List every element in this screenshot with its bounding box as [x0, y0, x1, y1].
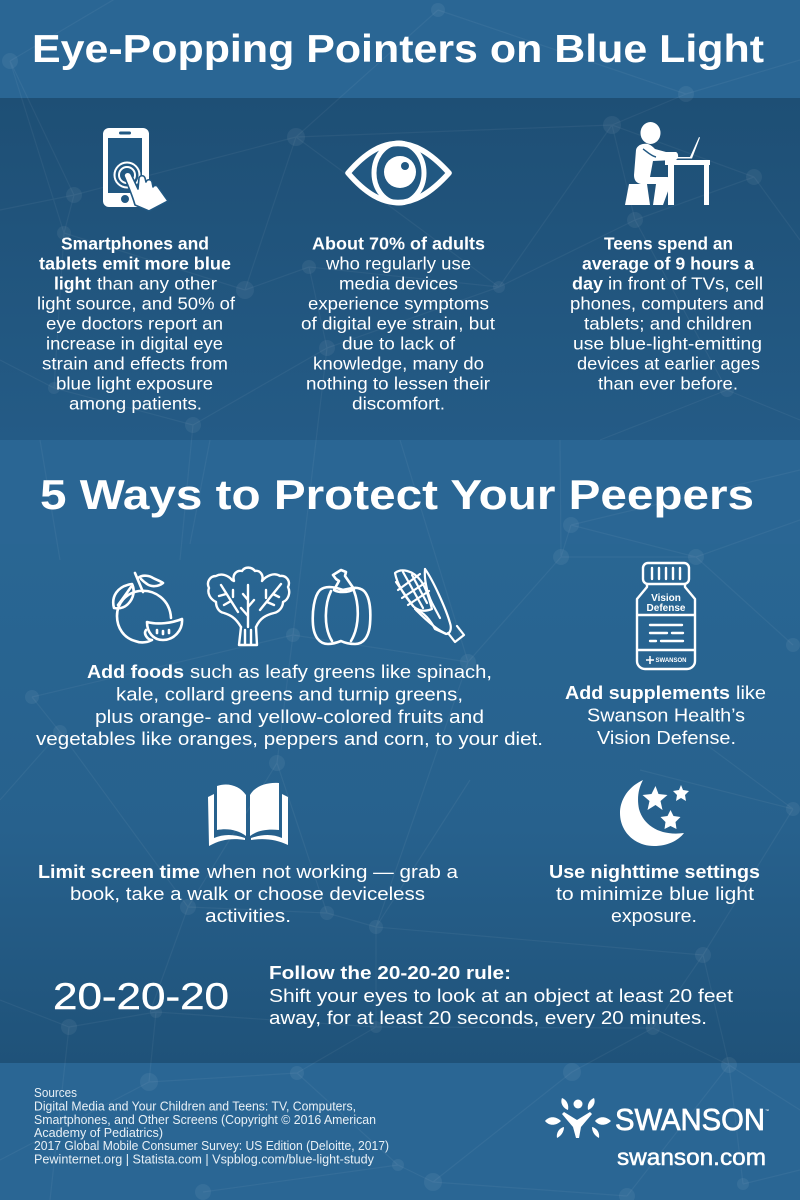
- icon: smartphone touch: [103, 128, 168, 211]
- text: 20-20-20 rule: Follow the 20-20-20 rule:: [269, 962, 511, 983]
- text: teens: than ever before.: [598, 374, 738, 394]
- icon: supplement bottle: Defense: [647, 603, 686, 614]
- text: eye strain: knowledge, many do: [313, 354, 484, 374]
- text: eye strain: [301, 234, 495, 414]
- panel: protection tips: [36, 563, 766, 1028]
- text: eye strain: media devices: [339, 274, 458, 294]
- text: limit screen time: [38, 861, 459, 926]
- text: add foods: [36, 661, 543, 749]
- text: eye strain: About 70% of adults: [312, 234, 485, 254]
- icon: supplement bottle: [637, 563, 695, 669]
- icon: moon and stars: [620, 780, 689, 846]
- text: limit screen time: Limit screen time: [38, 861, 200, 882]
- text: teens: devices at earlier ages: [577, 354, 760, 374]
- text: smartphones: light source, and 50% of: [37, 294, 235, 314]
- text: smartphones: than any other: [97, 274, 217, 294]
- title: Eye-Popping Pointers on Blue Light: [32, 28, 764, 71]
- sources: Digital Media and Your Children and Teens: TV, Computers,: [34, 1100, 356, 1114]
- text: eye strain: nothing to lessen their: [306, 374, 490, 394]
- text: teens: [570, 234, 764, 394]
- text: 20-20-20 rule: [269, 962, 733, 1028]
- sources: Smartphones, and Other Screens (Copyright © 2016 American: [34, 1113, 376, 1127]
- text: smartphones: among patients.: [69, 394, 202, 414]
- text: smartphones: strain and effects from: [42, 354, 228, 374]
- icon: person at laptop: [625, 122, 710, 205]
- text: limit screen time: book, take a walk or choose deviceless: [70, 883, 425, 904]
- sources: 2017 Global Mobile Consumer Survey: US Edition (Deloitte, 2017): [34, 1139, 389, 1153]
- text: add supplements: like: [736, 682, 766, 703]
- text: smartphones: tablets emit more blue: [39, 254, 231, 274]
- text: smartphones: increase in digital eye: [46, 334, 223, 354]
- text: nighttime settings: exposure.: [611, 905, 697, 926]
- icon: bell pepper: [313, 570, 370, 644]
- text: add foods: kale, collard greens and turnip greens,: [116, 684, 463, 704]
- text: eye strain: of digital eye strain, but: [301, 314, 495, 334]
- text: teens: tablets; and children: [584, 314, 752, 334]
- text: teens: phones, computers and: [570, 294, 764, 314]
- text: teens: Teens spend an: [604, 234, 733, 254]
- text: add supplements: Add supplements: [565, 682, 730, 703]
- text: add foods: Add foods: [87, 661, 184, 682]
- icon: corn: [395, 569, 464, 642]
- text: limit screen time: when not working — grab a: [206, 861, 459, 882]
- text: smartphones: light: [54, 274, 91, 294]
- logo: Swanson: [545, 1098, 769, 1138]
- text: add foods: plus orange- and yellow-colored fruits and: [95, 706, 484, 727]
- heading: 5 ways: 5 Ways to Protect Your Peepers: [40, 471, 754, 518]
- icon: supplement bottle: Vision: [651, 593, 681, 604]
- text: nighttime settings: to minimize blue light: [556, 883, 754, 904]
- sources: Pewinternet.org | Statista.com | Vspblog.com/blue-light-study: [34, 1152, 375, 1166]
- text: nighttime settings: Use nighttime settings: [549, 861, 760, 882]
- text: add foods: such as leafy greens like spinach,: [190, 661, 492, 682]
- text: teens: average of 9 hours a: [582, 254, 754, 274]
- icon: orange: [113, 573, 182, 642]
- text: 20-20-20 rule: away, for at least 20 seconds, every 20 minutes.: [269, 1007, 707, 1028]
- sources: Academy of Pediatrics): [34, 1126, 163, 1140]
- text: smartphones: blue light exposure: [56, 374, 213, 394]
- panel: blue light facts: [37, 122, 764, 414]
- sources: [34, 1086, 389, 1166]
- text: smartphones: eye doctors report an: [46, 314, 223, 334]
- icon: open book: [208, 783, 288, 846]
- text: eye strain: who regularly use: [325, 254, 471, 274]
- text: add supplements: Swanson Health’s: [587, 704, 745, 726]
- icon: spinach: [208, 568, 289, 645]
- icon: eye: [348, 143, 449, 203]
- text: 20-20-20 rule: Shift your eyes to look at an object at least 20 feet: [269, 985, 733, 1006]
- text: eye strain: experience symptoms: [308, 294, 489, 314]
- icon: supplement bottle: SWANSON: [655, 658, 687, 664]
- sources: Sources: [34, 1086, 77, 1100]
- text: smartphones: Smartphones and: [61, 234, 209, 254]
- callout: 20-20-20 number: 20-20-20: [53, 976, 229, 1017]
- text: limit screen time: activities.: [205, 905, 291, 926]
- text: teens: day: [572, 274, 603, 294]
- logo: Swanson: ™: [765, 1108, 769, 1113]
- text: teens: use blue-light-emitting: [573, 334, 762, 354]
- text: eye strain: due to lack of: [342, 334, 455, 354]
- text: add supplements: Vision Defense.: [597, 727, 736, 748]
- text: add foods: vegetables like oranges, peppers and corn, to your diet.: [36, 728, 543, 749]
- logo: Swanson: SWANSON: [615, 1102, 765, 1137]
- text: teens: in front of TVs, cell: [608, 274, 763, 294]
- text: add supplements: [565, 682, 766, 748]
- text: eye strain: discomfort.: [352, 394, 445, 414]
- text: nighttime settings: [549, 861, 760, 926]
- website: swanson.com: [617, 1144, 766, 1170]
- text: smartphones: [37, 234, 235, 414]
